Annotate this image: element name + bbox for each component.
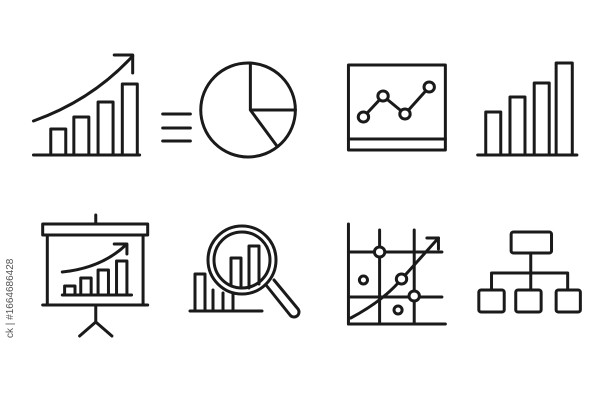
icon: bar chart (478, 63, 577, 155)
icon: scatter grid with trend (348, 224, 445, 324)
icon: presentation board (43, 215, 148, 336)
watermark text: ck | #1664686428 (5, 259, 16, 338)
icon: line chart on monitor (348, 65, 445, 150)
icon: magnifier over bars (190, 226, 299, 317)
icon: growth bar chart with arrow (33, 55, 140, 155)
icon: hierarchy (479, 232, 580, 312)
icon: pie chart with list lines (163, 63, 295, 157)
